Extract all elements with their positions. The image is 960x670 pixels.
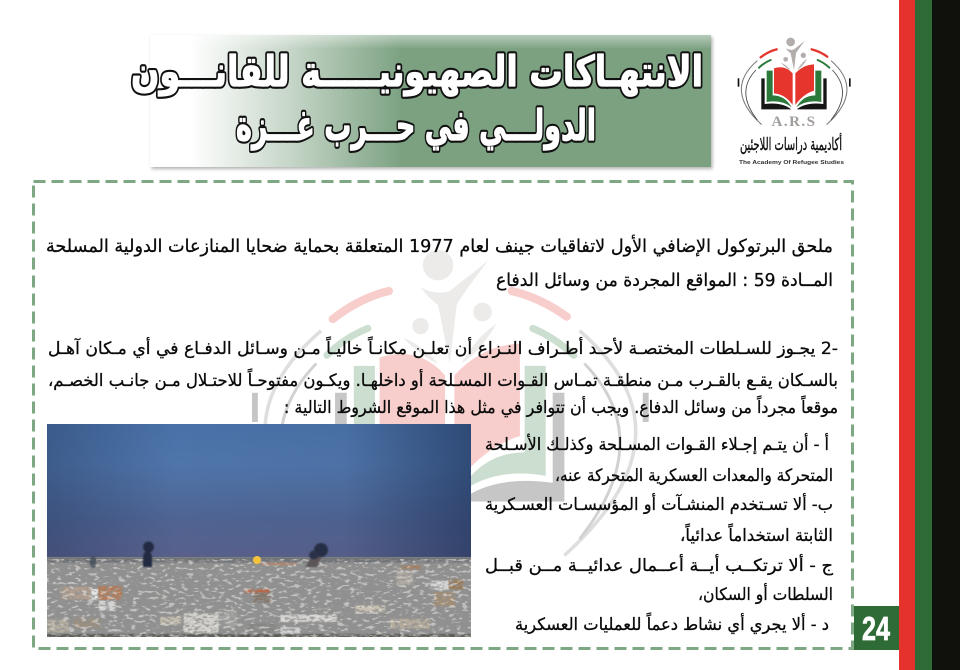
article paragraph: موقعاً مجرداً من وسائل الدفاع. ويجب أن تتوافر في مثل هذا الموقع الشروط التالية : xyxy=(284,394,838,418)
logo english name: The Academy Of Refugee Studies xyxy=(739,160,844,166)
logo arabic name: أكاديمية دراسات اللاجئين xyxy=(740,133,842,155)
conditions list: ج - ألا ترتكــب أيــة أعــمال عدائيــة مــن قبــل xyxy=(485,554,833,576)
article paragraph: -2 يجـوز للسـلطات المختصـة لأحـد أطـراف النـزاع أن تعلـن مكانـاً خاليـاً مـن وسـائل الدفـاع في أي مـكان آهـل xyxy=(48,335,838,359)
title text: الدولـــي في حـــرب غـــزة xyxy=(236,101,596,151)
smoke plume left xyxy=(143,542,154,567)
conditions list: السلطات أو السكان، xyxy=(698,583,833,605)
side stripes: red, green, black xyxy=(899,0,960,670)
heading text block xyxy=(46,235,833,291)
dashed content frame xyxy=(34,182,852,648)
conditions list: ب- ألا تسـتخدم المنشـآت أو المؤسسـات العسـكرية xyxy=(485,493,833,515)
smoke plume right xyxy=(305,543,328,567)
watermark logo xyxy=(252,250,649,555)
conditions list: د - ألا يجري أي نشاط دعماً للعمليات العسكرية xyxy=(515,611,829,635)
title text xyxy=(131,47,703,151)
title text: الانتهـاكات الصهيونيـــــة للقانـــون xyxy=(131,47,703,97)
heading text block: ملحق البرتوكول الإضافي الأول لاتفاقيات جينف لعام 1977 المتعلقة بحماية ضحايا المنازعات الدولية المسلحة xyxy=(46,235,833,257)
conditions list: أ - أن يتـم إجـلاء القـوات المسـلحة وكذلـك الأسـلحة xyxy=(485,433,829,455)
conditions list: المتحركة والمعدات العسكرية المتحركة عنه، xyxy=(555,466,833,486)
title banner xyxy=(131,35,711,167)
conditions list xyxy=(485,433,833,635)
logo: Academy of Refugee Studies xyxy=(738,38,851,166)
conditions list: الثابتة استخداماً عدائياً، xyxy=(680,522,833,546)
article paragraph: بالسـكان يقـع بالقـرب مـن منطقـة تمـاس القـوات المسـلحة أو داخلهـا. ويكـون مفتوحـاً للاحتـلال مـن جانـب الخصـم، xyxy=(48,367,838,391)
faint smoke far left xyxy=(90,556,96,568)
page number xyxy=(854,606,899,650)
title text: الدولـــي في حـــرب غـــزة xyxy=(236,101,596,151)
article paragraph xyxy=(48,335,838,418)
logo initials: A.R.S xyxy=(771,114,817,130)
page number: 24 xyxy=(862,610,890,647)
heading text block: المــادة 59 : المواقع المجردة من وسائل الدفاع xyxy=(496,270,833,291)
title text: الانتهـاكات الصهيونيـــــة للقانـــون xyxy=(131,47,703,97)
fireball xyxy=(253,556,261,564)
photo: smoke over Gaza skyline xyxy=(47,424,471,638)
city texture xyxy=(47,559,471,637)
